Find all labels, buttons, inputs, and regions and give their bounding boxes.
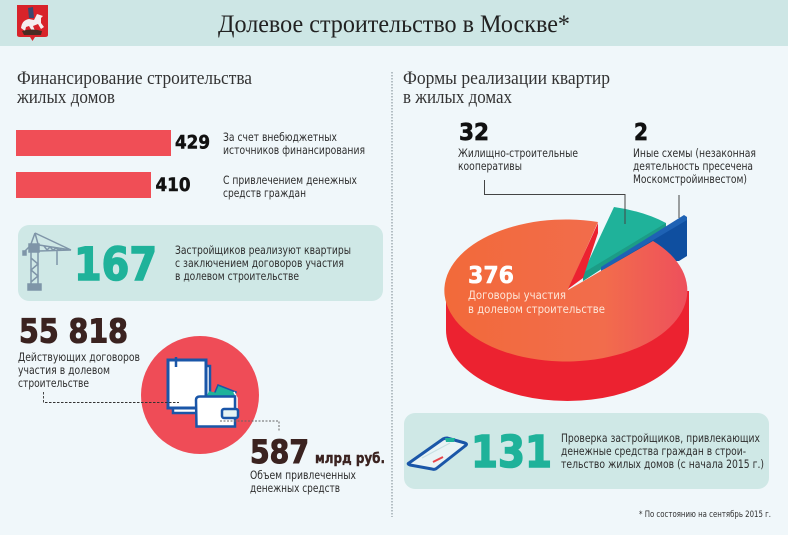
panel: developers 167: в долевом строительстве xyxy=(175,269,299,283)
label: 32 cooperatives xyxy=(458,118,578,173)
label: 2 other schemes xyxy=(633,118,756,186)
title: Долевое строительство в Москве* xyxy=(218,11,570,38)
heading: financing: жилых домов xyxy=(16,88,115,108)
stat: 55 818 contracts: участия в долевом xyxy=(18,363,110,377)
pie slice: participation contracts: в долевом строительстве xyxy=(468,302,605,316)
stat: 55 818 contracts xyxy=(18,312,140,390)
stat: 55 818 contracts: 55 818 xyxy=(19,312,128,350)
pie slice: cooperatives xyxy=(583,207,666,281)
stat: 55 818 contracts: строительстве xyxy=(18,376,89,390)
stat: 587 billion rubles xyxy=(250,433,385,495)
heading: financing xyxy=(16,69,252,108)
stat: 55 818 contracts: Действующих договоров xyxy=(18,350,140,364)
connector: funds xyxy=(220,421,279,432)
heading: forms of sale: в жилых домах xyxy=(403,88,513,108)
heading: forms of sale: Формы реализации квартир xyxy=(403,69,610,89)
bar chart: financing sources xyxy=(16,130,365,200)
label: 2 other schemes: деятельность пресечена xyxy=(633,159,753,173)
panel: inspections 131: денежные средства граждан в строи- xyxy=(561,444,746,458)
stat: 587 billion rubles: млрд руб. xyxy=(315,451,385,467)
label: 32 cooperatives: 32 xyxy=(459,118,489,146)
icon: Moscow coat of arms xyxy=(17,5,48,41)
bar: 410: С привлечением денежных xyxy=(223,173,357,187)
pie slice: participation contracts xyxy=(444,219,689,401)
heading: financing: Финансирование строительства xyxy=(17,69,252,89)
pie slice: participation contracts: Договоры участия xyxy=(468,288,566,302)
pie slice: participation contracts: 376 xyxy=(468,261,514,289)
stat: 587 billion rubles: 587 xyxy=(250,433,309,471)
label: 32 cooperatives: кооперативы xyxy=(458,159,522,173)
bar: 429: 429 xyxy=(175,132,210,154)
panel: inspections 131 xyxy=(404,413,769,489)
label: 2 other schemes: Иные схемы (незаконная xyxy=(633,146,756,160)
label: 32 cooperatives: Жилищно-строительные xyxy=(458,146,578,160)
panel: developers 167 xyxy=(18,225,383,301)
label: 2 other schemes: 2 xyxy=(634,118,648,146)
panel: inspections 131: 131 xyxy=(471,427,552,478)
icon: crane xyxy=(23,233,71,290)
panel: developers 167: с заключением договоров участия xyxy=(175,256,344,270)
leader line: cooperatives xyxy=(484,180,625,224)
heading: forms of sale xyxy=(403,69,610,108)
bar: 429: За счет внебюджетных xyxy=(223,130,337,144)
bar: 410 xyxy=(16,172,357,200)
bar: 429: источников финансирования xyxy=(223,143,365,157)
stat: 587 billion rubles: денежных средств xyxy=(250,481,340,495)
header band xyxy=(0,0,788,46)
label: 2 other schemes: Москомстройинвестом) xyxy=(633,172,747,186)
leader line: other schemes xyxy=(678,195,680,218)
stat: 587 billion rubles: Объем привлеченных xyxy=(250,468,356,482)
panel: developers 167: 167 xyxy=(74,238,157,291)
bar: 410: средств граждан xyxy=(223,186,306,200)
icon: clipboard xyxy=(408,438,466,469)
pie slice: other schemes xyxy=(601,215,687,271)
bar: 429 xyxy=(16,130,365,157)
icon: notebook and wallet in red circle xyxy=(141,336,259,454)
bar: 410: 410 xyxy=(156,175,190,196)
panel: developers 167: Застройщиков реализуют квартиры xyxy=(175,243,351,257)
pie chart xyxy=(444,207,689,401)
connector: contracts xyxy=(44,392,179,402)
